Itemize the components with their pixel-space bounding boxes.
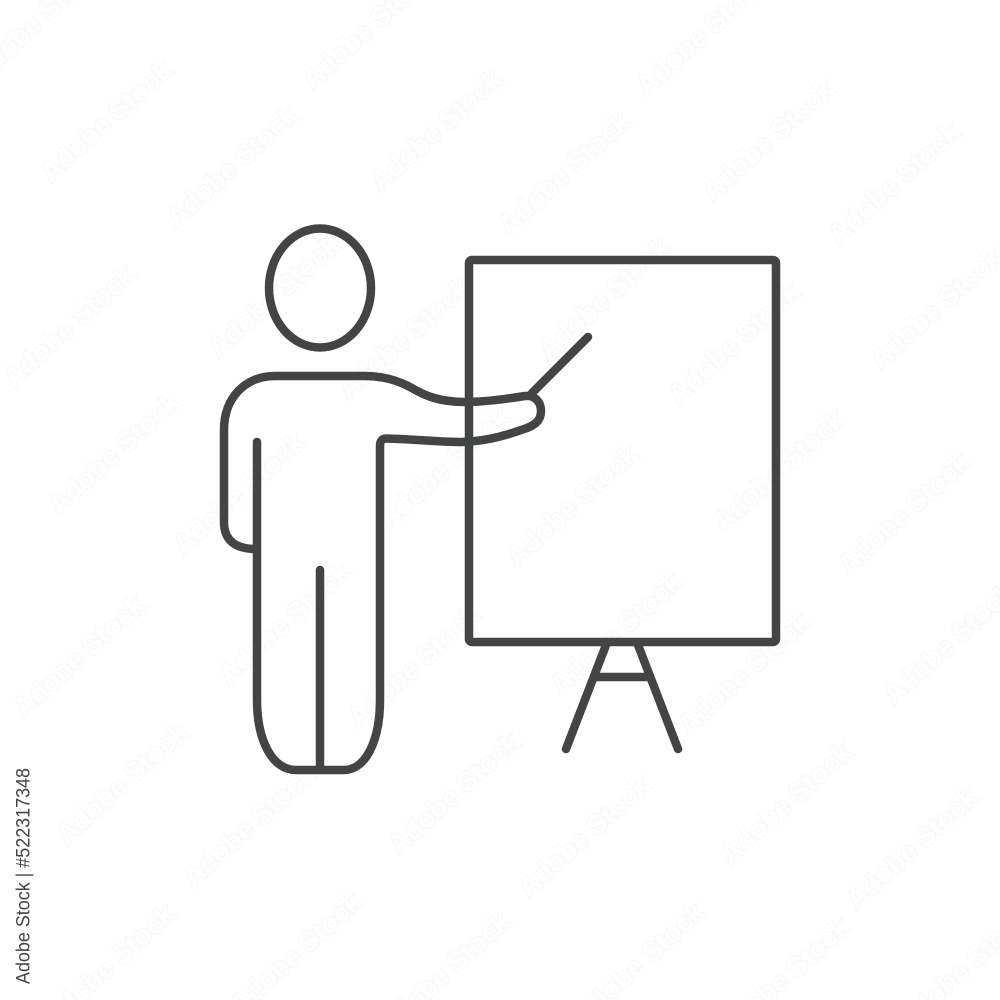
stock watermark pattern: Adobe Stock — [697, 73, 840, 207]
icon: flip chart board — [469, 260, 776, 642]
stock watermark pattern: Adobe Stock — [493, 106, 636, 240]
stock watermark pattern: Adobe Stock — [0, 259, 141, 393]
stock watermark pattern: Adobe Stock — [168, 426, 311, 560]
stock watermark pattern: Adobe Stock — [841, 781, 984, 915]
stock watermark pattern: Adobe Stock — [333, 271, 476, 405]
stock watermark pattern: Adobe Stock — [343, 599, 486, 733]
icon: presenter at flip chart — [224, 228, 776, 770]
stock watermark pattern: Adobe Stock — [383, 726, 526, 860]
icon: presenter body — [224, 376, 541, 770]
stock watermark pattern: Adobe Stock — [708, 403, 851, 537]
stock watermark pattern: Adobe Stock — [833, 446, 976, 580]
stock watermark pattern: Adobe Stock — [35, 54, 178, 188]
stock watermark pattern: Adobe Stock — [178, 759, 321, 893]
stock id side label: Adobe Stock | #522317348 — [14, 768, 34, 984]
stock watermark pattern: Adobe Stock — [823, 116, 966, 250]
stock watermark pattern: Adobe Stock — [533, 231, 676, 365]
stock watermark pattern: Adobe Stock — [203, 229, 346, 363]
icon: pointer stick — [532, 337, 588, 393]
stock watermark pattern: Adobe Stock — [161, 99, 304, 233]
stock watermark pattern: Adobe Stock — [8, 589, 151, 723]
stock watermark pattern: Adobe Stock — [513, 769, 656, 903]
icon: leg divider — [316, 570, 324, 770]
stock watermark pattern: Adobe Stock — [673, 606, 816, 740]
icon: presenter head — [269, 228, 371, 348]
stock watermark pattern: Adobe Stock — [43, 386, 186, 520]
stock watermark pattern: Adobe Stock — [51, 716, 194, 850]
stock watermark pattern: Adobe Stock — [715, 736, 858, 870]
stock watermark pattern: Adobe Stock — [213, 556, 356, 690]
stock watermark pattern: Adobe Stock — [545, 566, 688, 700]
stock watermark pattern: Adobe Stock — [365, 63, 508, 197]
icon: flip chart stand — [566, 645, 678, 749]
stock watermark pattern: Adobe Stock — [501, 438, 644, 572]
stock watermark pattern: Adobe Stock — [663, 276, 806, 410]
stock watermark pattern: Adobe Stock — [373, 401, 516, 535]
